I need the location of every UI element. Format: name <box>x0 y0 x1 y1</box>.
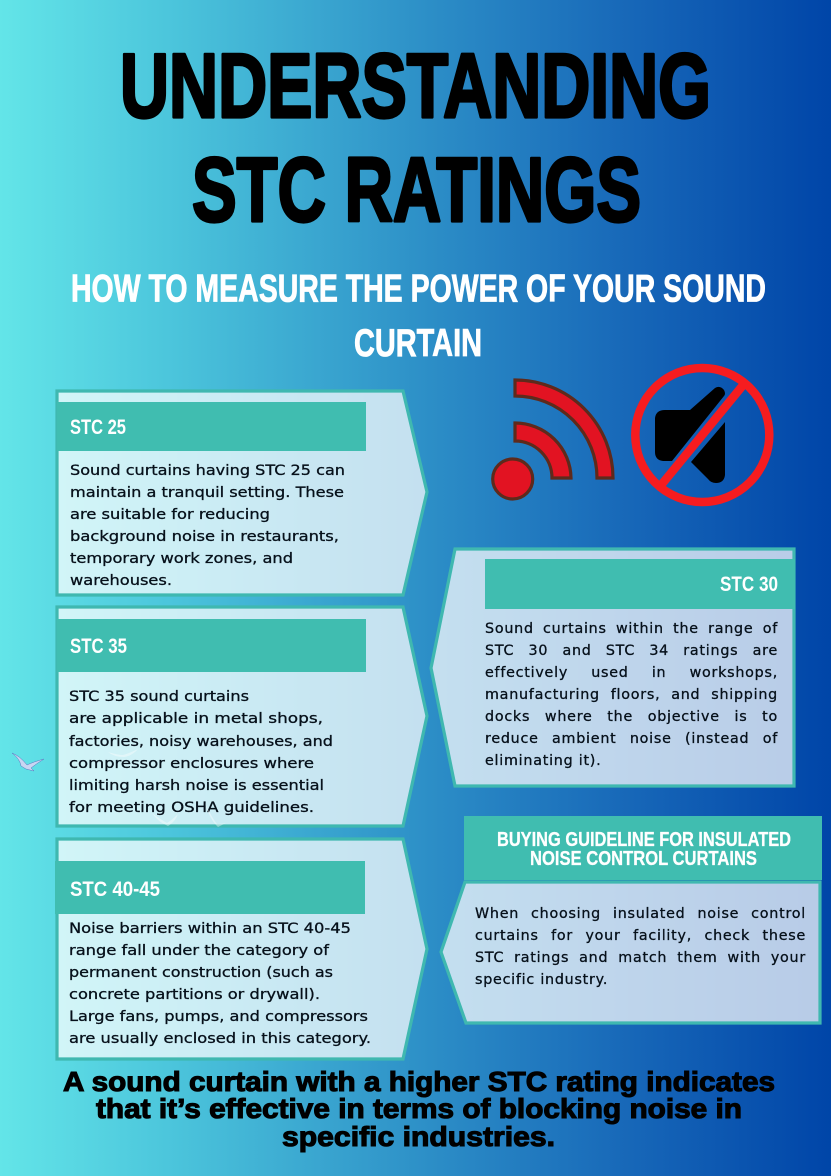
text: STC 25 description: background noise in restaurants, <box>70 529 339 545</box>
heading: buying guideline <box>497 829 791 870</box>
text: STC 25 description: Sound curtains having STC 25 can <box>70 463 345 479</box>
panel: STC 25 <box>57 391 427 595</box>
text: STC 35 description <box>69 689 333 816</box>
text: STC 40-45 description: concrete partitions or drywall). <box>69 987 320 1003</box>
heading: STC 35: STC 35 <box>70 635 127 658</box>
text: STC 40-45 description: permanent construction (such as <box>69 965 333 981</box>
text: buying guideline description: curtains for your facility, check these <box>475 928 806 944</box>
text: STC 30 description <box>485 618 778 772</box>
text: STC 30 description: Sound curtains within the range of <box>485 621 778 637</box>
text: STC 30 description: manufacturing floors, and shipping <box>485 687 778 703</box>
panel: STC 40-45 <box>55 839 427 1059</box>
title <box>120 36 711 241</box>
heading: STC 30: STC 30 <box>720 573 778 596</box>
text: STC 35 description: factories, noisy warehouses, and <box>69 734 333 750</box>
title: STC RATINGS <box>192 140 641 241</box>
text: STC 40-45 description: Large fans, pumps, and compressors <box>69 1009 368 1025</box>
heading: STC 25: STC 25 <box>70 416 126 439</box>
icon: muted speaker <box>635 368 769 502</box>
text: buying guideline description: When choosing insulated noise control <box>475 906 806 922</box>
text: STC 25 description: temporary work zones, and <box>70 551 293 567</box>
closing statement <box>63 1066 775 1152</box>
icon: sound waves <box>493 380 613 499</box>
text: STC 30 description: docks where the objective is to <box>485 709 778 725</box>
text: buying guideline description: STC ratings and match them with your <box>475 950 806 966</box>
closing statement: that it’s effective in terms of blocking noise in <box>96 1093 742 1124</box>
panel: STC 35 <box>57 607 427 826</box>
text: STC 30 description: STC 30 and STC 34 ratings are <box>485 643 778 659</box>
subtitle: CURTAIN <box>354 322 482 365</box>
text: STC 35 description: compressor enclosures where <box>69 756 314 772</box>
heading: STC 40-45: STC 40-45 <box>70 878 160 901</box>
text: STC 25 description: warehouses. <box>70 573 172 589</box>
closing statement: specific industries. <box>282 1121 555 1152</box>
text: STC 30 description: eliminating it). <box>485 753 601 769</box>
closing statement: A sound curtain with a higher STC rating indicates <box>63 1066 775 1097</box>
text: STC 35 description: STC 35 sound curtains <box>69 689 249 705</box>
text: STC 40-45 description: are usually enclosed in this category. <box>69 1031 371 1047</box>
panel: STC 30 <box>431 549 795 786</box>
icon: seagull <box>12 753 44 771</box>
text: STC 40-45 description <box>69 921 371 1047</box>
text: buying guideline description <box>475 903 806 991</box>
text: STC 25 description: maintain a tranquil setting. These <box>70 485 344 501</box>
text: STC 30 description: effectively used in workshops, <box>485 665 778 681</box>
subtitle <box>71 268 766 365</box>
text: STC 40-45 description: range fall under the category of <box>69 943 330 959</box>
text: STC 35 description: for meeting OSHA guidelines. <box>69 800 314 816</box>
text: STC 30 description: reduce ambient noise (instead of <box>485 731 778 747</box>
text: buying guideline description: specific industry. <box>475 972 608 988</box>
heading: buying guideline: NOISE CONTROL CURTAINS <box>530 848 757 870</box>
text: STC 35 description: are applicable in metal shops, <box>69 711 323 727</box>
decorative: faint seagulls <box>108 749 226 827</box>
text: STC 25 description <box>70 463 345 589</box>
text: STC 40-45 description: Noise barriers within an STC 40-45 <box>69 921 351 937</box>
text: STC 25 description: are suitable for reducing <box>70 507 270 523</box>
text: STC 35 description: limiting harsh noise is essential <box>69 778 324 794</box>
panel: buying guideline <box>441 816 822 1023</box>
